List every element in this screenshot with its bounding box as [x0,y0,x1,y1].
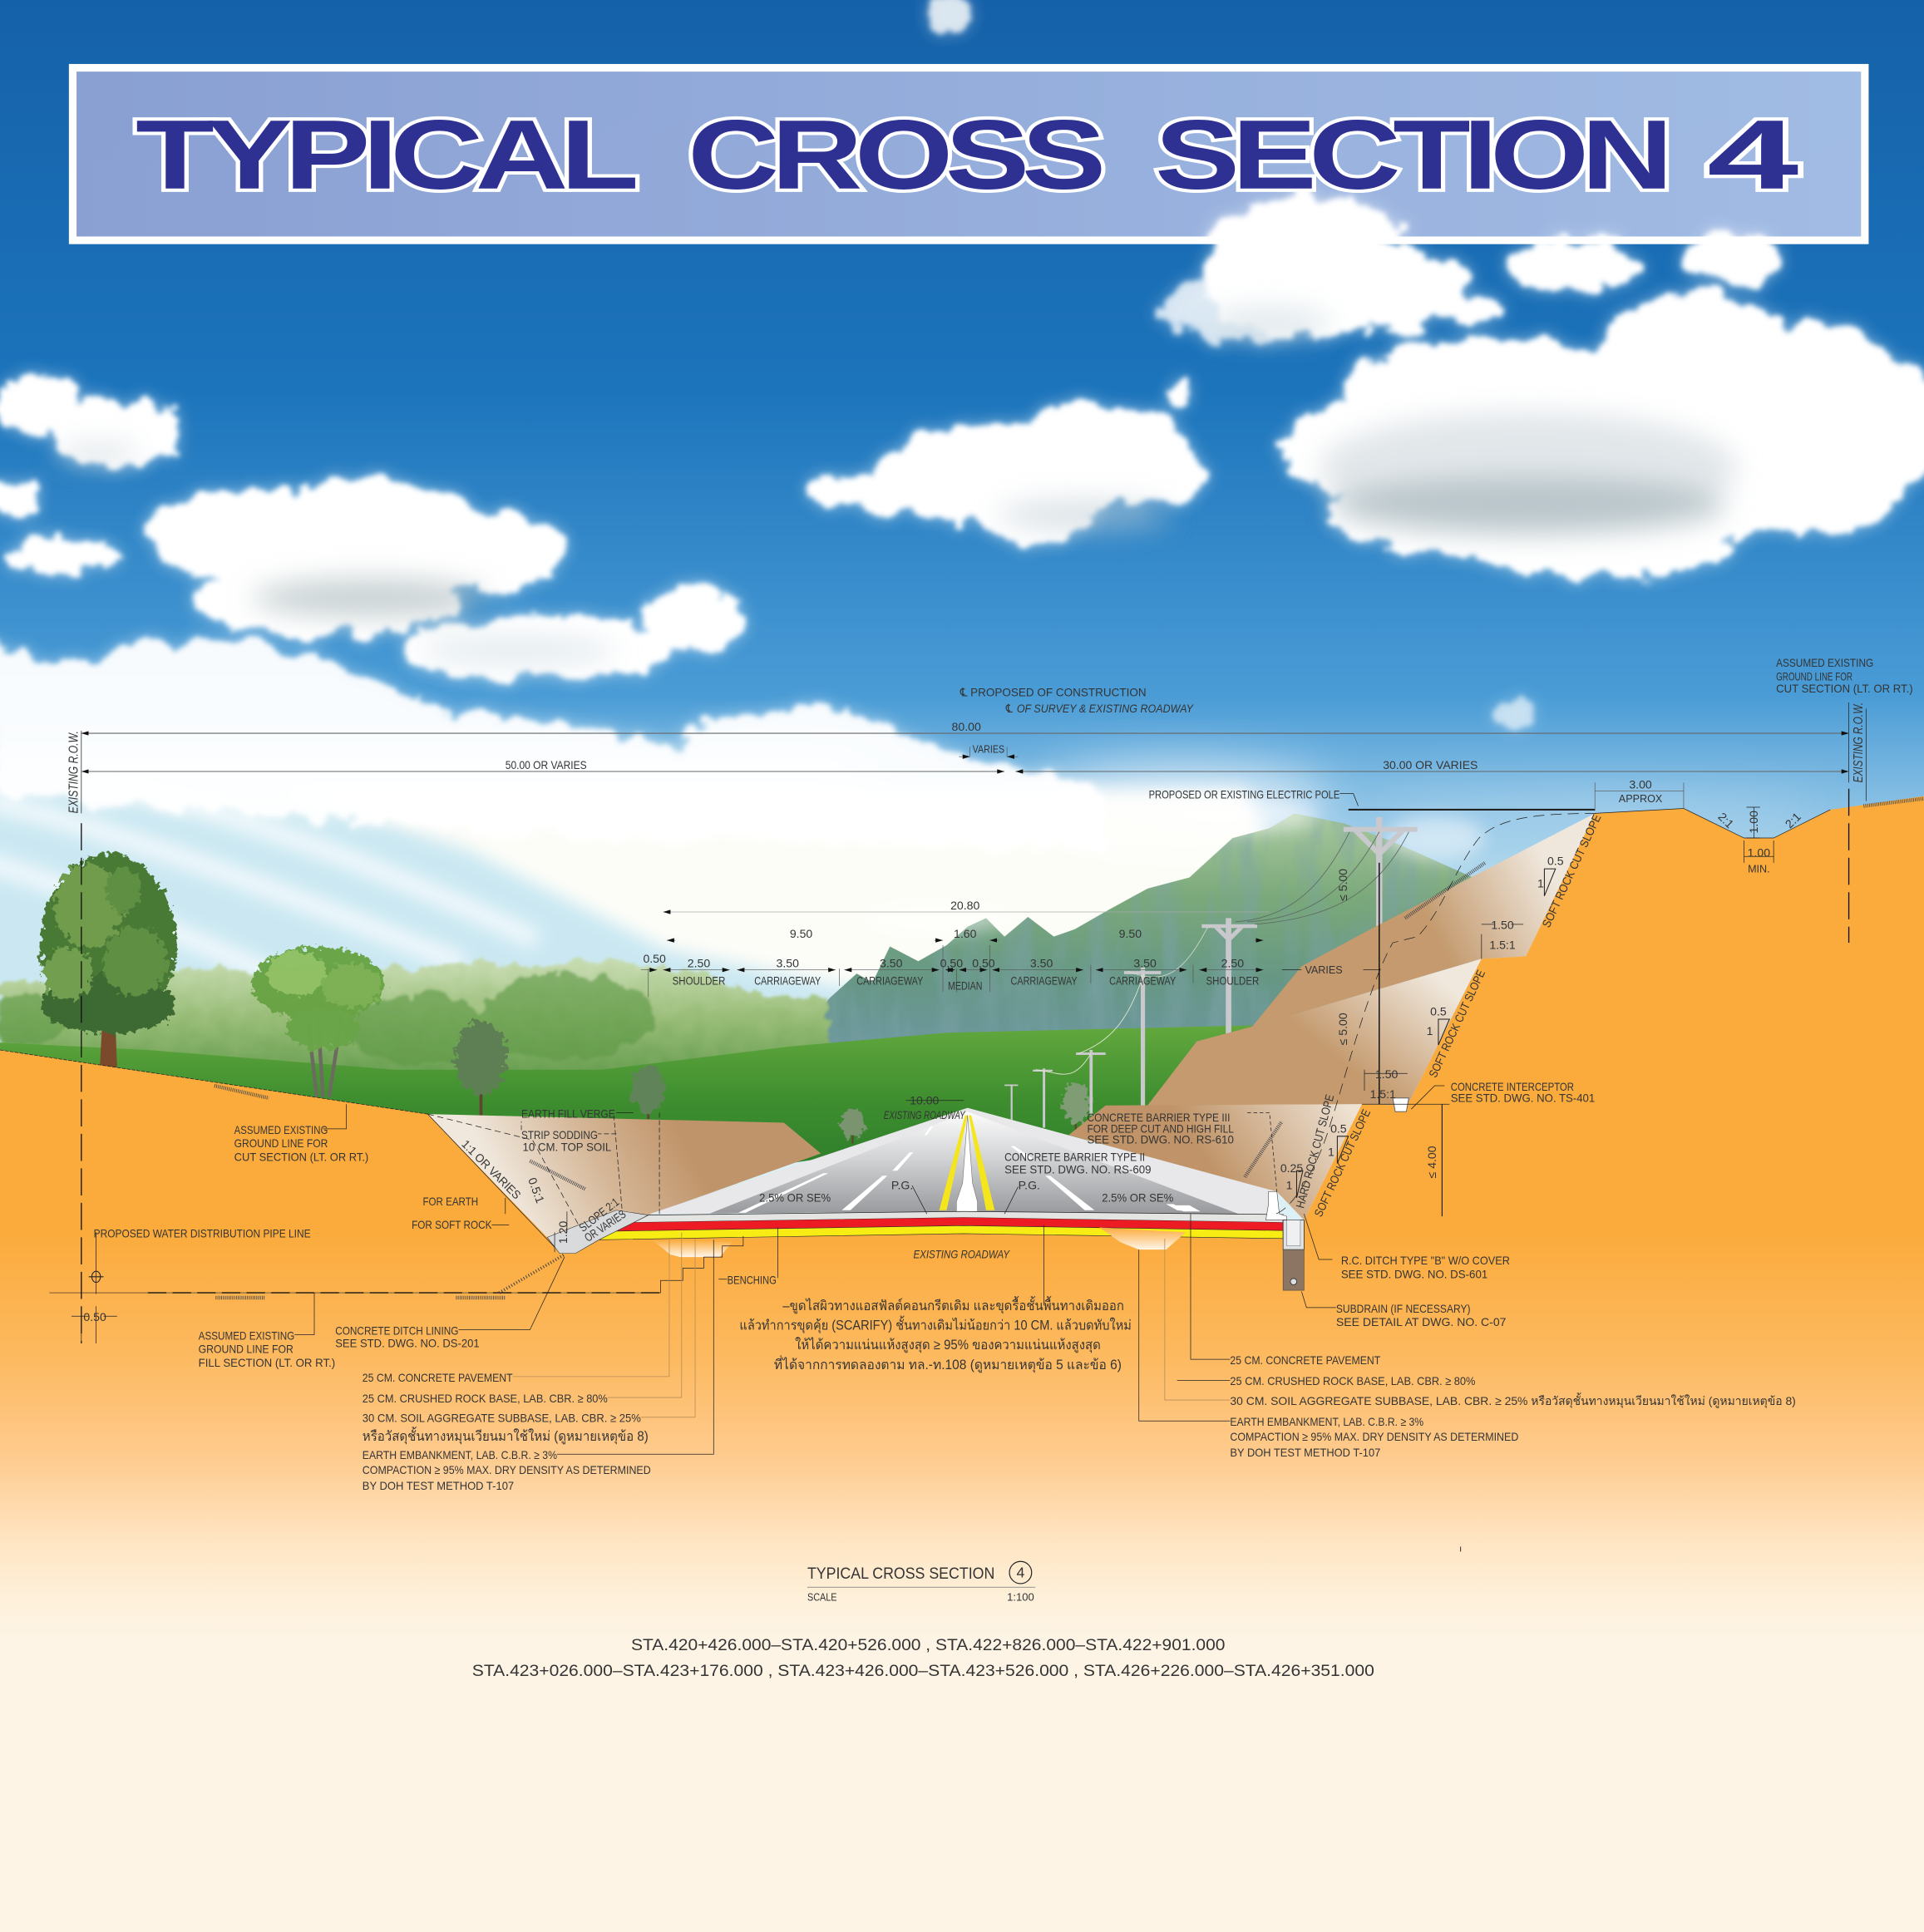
label: barrier type II: SEE STD. DWG. NO. RS-609 [1004,1162,1152,1175]
Thai note block: ที่ได้จากการทดลองตาม ทล.-ท.108 (ดูหมายเหตุข้อ 5 และข้อ 6) [774,1355,1122,1373]
label: assumed ground cut left [234,1123,368,1163]
section number badge [1009,1561,1032,1584]
stairs benching line [49,1236,743,1293]
fill slope dotted [499,1254,565,1293]
label: assumed ground right [1776,656,1913,695]
title text: 4 [1707,101,1798,210]
soil slope: right upper [1252,813,1595,1027]
label: centerline of construction: ℄ PROPOSED OF CONSTRUCTION [960,686,1147,699]
dimension chain: road widths: SHOULDER [1206,973,1259,987]
dimension chain: road widths: SHOULDER [673,973,725,987]
labels: cut slopes right: VARIES [1305,964,1343,976]
label: earth fill verge: EARTH FILL VERGE [521,1107,615,1121]
labels: cut slopes right: SOFT ROCK CUT SLOPE [1539,812,1604,929]
pavement notes: left: EARTH EMBANKMENT, LAB. C.B.R. ≥ 3% [363,1448,557,1461]
road left edge band [649,1108,968,1214]
subdrain [1283,1249,1304,1290]
pavement notes: left: 30 CM. SOIL AGGREGATE SUBBASE, LAB. CBR. ≥ 25% [363,1412,641,1425]
soil slope: right middle [1147,959,1482,1106]
lane dashes [738,1126,1201,1213]
label: concrete interceptor: CONCRETE INTERCEPTOR [1451,1080,1574,1093]
labels: cut slopes right: SOFT ROCK CUT SLOPE [1311,1107,1373,1219]
cloud: left [0,375,179,574]
label: centerline of construction: ℄ OF SURVEY & EXISTING ROADWAY [1004,702,1194,715]
label: concrete ditch lining: CONCRETE DITCH LINING [335,1323,458,1337]
dimension chain: road widths: 3.50 [1030,957,1053,970]
labels: right ditch dims: 1.00 [1748,845,1770,859]
Thai note block: แล้วทำการขุดคุ้ย (SCARIFY) ชั้นทางเดิมไม่น้อยกว่า 10 CM. แล้วบดทับใหม่ [739,1315,1132,1334]
title text: SECTION [1155,101,1665,210]
dimension chain: road widths [643,899,1259,992]
concrete interceptor [1393,1098,1408,1111]
cloud seen through panel [1201,186,1772,236]
road right edge band [968,1108,1277,1215]
dimension chain: road widths: 0.50 [643,952,666,965]
pipe symbol [89,1271,104,1282]
road surface [649,1108,1277,1220]
label: RC ditch: R.C. DITCH TYPE "B" W/O COVER [1341,1254,1510,1267]
pavement notes: right: BY DOH TEST METHOD T-107 [1230,1446,1380,1459]
benching right [1099,1227,1186,1249]
section number badge: 4 [1016,1565,1024,1581]
title panel [72,68,1865,298]
labels: cut slopes right: HARD ROCK CUT SLOPE [1293,1093,1336,1210]
labels: cut slopes right: ≤ 5.00 [1336,1013,1349,1045]
mountain [792,813,1473,1053]
labels: left slope: 1.20 [556,1221,570,1244]
labels: cut slopes right [1280,812,1604,1219]
pavement notes: right [1230,1353,1796,1459]
labels: cut slopes right: 0.5 [1330,1121,1347,1135]
pavement notes: left: BY DOH TEST METHOD T-107 [363,1479,514,1492]
label: assumed ground cut left: CUT SECTION (LT. OR RT.) [234,1150,368,1163]
label: assumed ground right: ASSUMED EXISTING [1776,656,1873,669]
section caption [807,1561,1035,1604]
title text [136,101,1798,210]
mountain fog [863,799,1485,933]
pole: third [1124,968,1161,1106]
label: centerline of construction [960,686,1194,715]
labels: right ditch dims: 3.00 [1629,778,1652,791]
label: water pipe: PROPOSED WATER DISTRIBUTION PIPE LINE [94,1226,311,1240]
dimension chain: road widths: 1.60 [954,927,977,940]
title text: CROSS [688,101,1102,210]
title text: TYPICAL [136,101,635,210]
labels: cut slopes right: ≤ 4.00 [1425,1146,1438,1178]
side barrier right [1265,1192,1287,1220]
cloud: right large [1285,296,1924,575]
soil slope: left [427,1114,821,1254]
main pole dark core [1379,863,1380,1104]
labels: cut slopes right: 1.5:1 [1370,1087,1396,1101]
labels: cut slopes right: SOFT ROCK CUT SLOPE [1426,968,1487,1079]
label: assumed ground cut left: GROUND LINE FOR [234,1136,328,1150]
labels: cut slopes right: 1 [1537,876,1544,890]
label: assumed ground right: GROUND LINE FOR [1776,669,1852,683]
yellow centre lines [940,1116,994,1210]
label: concrete ditch lining: SEE STD. DWG. NO. DS-201 [335,1336,480,1349]
labels: left slope: OR VARIES [582,1207,628,1244]
forest dark core [0,973,654,1063]
cloud: mid left [153,481,751,678]
ground hatches [215,799,1924,1298]
pavement notes: right: 30 CM. SOIL AGGREGATE SUBBASE, LAB. CBR. ≥ 25% หรือวัสดุชั้นทางหมุนเวียนมาใช้ใหม่ (ดูหมายเหตุข้อ 8) [1230,1392,1796,1408]
road labels: 2.5% OR SE% [759,1190,831,1204]
pavement notes: right: COMPACTION ≥ 95% MAX. DRY DENSITY AS DETERMINED [1230,1430,1518,1443]
label: strip sodding [521,1128,611,1154]
dimension chain: road widths: 3.50 [777,957,799,970]
dimension chain: road widths: 3.50 [880,957,903,970]
labels: cut slopes right: ≤ 5.00 [1336,869,1349,901]
labels: cut slopes right: 0.5 [1547,855,1564,868]
R.C. ditch [1283,1220,1304,1249]
top dimension labels [506,720,1478,771]
label: concrete ditch lining [335,1323,480,1349]
label: subdrain: SEE DETAIL AT DWG. NO. C-07 [1336,1315,1507,1328]
haze: pale cyan left [0,758,863,1053]
dimension chain: road widths: 20.80 [950,899,979,912]
electric poles [1004,817,1418,1129]
dimension chain: road widths: 2.50 [688,957,710,970]
label: barrier type III [1087,1111,1234,1146]
labels: cut slopes right: 1.50 [1491,919,1514,932]
dimension lines [72,733,1849,1343]
leader lines [0,708,1866,1454]
cloud shading [57,308,1738,666]
Thai note block: –ขูดไสผิวทางแอสฟัลต์คอนกรีตเดิม และขุดรื้อชั้นพื้นทางเดิมออก [782,1295,1124,1314]
labels: left slope: 0.5:1 [525,1175,547,1205]
concrete slab [634,1211,1283,1223]
road labels [759,1093,1174,1261]
section caption: TYPICAL CROSS SECTION [807,1565,994,1583]
labels: right ditch dims [1619,778,1803,875]
dimension chain: road widths: 0.50 [940,957,963,970]
pole: main [1344,817,1418,1104]
road labels: 2.5% OR SE% [1102,1190,1174,1204]
section caption: SCALE [807,1592,837,1604]
label: 0.50 offset: 0.50 [83,1310,106,1323]
label: barrier type III: SEE STD. DWG. NO. RS-610 [1087,1133,1234,1146]
labels: right ditch dims: 2:1 [1783,810,1803,830]
pole: fifth [1033,1068,1053,1127]
labels: right ditch dims: 2:1 [1715,810,1737,830]
labels: right ditch dims: MIN. [1748,864,1770,875]
pavement notes: left: 25 CM. CONCRETE PAVEMENT [363,1371,513,1384]
road labels: P.G. [1019,1179,1040,1192]
Thai note block [739,1295,1132,1373]
soil slope: right lower [1068,1104,1362,1220]
label: strip sodding: 10 CM. TOP SOIL [523,1141,611,1154]
station ranges: STA.420+426.000–STA.420+526.000 , STA.422+826.000–STA.422+901.000 [631,1637,1225,1654]
label: assumed ground fill [199,1328,335,1369]
dimension chain: road widths: CARRIAGEWAY [856,973,924,987]
tree: second [251,947,385,1097]
slope triangles [1296,869,1556,1198]
power lines [1035,832,1408,1074]
road labels: EXISTING ROADWAY [884,1108,966,1121]
section caption: 1:100 [1007,1592,1034,1604]
labels: right ditch dims: 1.00 [1747,811,1760,833]
road labels: EXISTING ROADWAY [913,1248,1010,1261]
top dimension labels: 80.00 [952,720,981,733]
dimension chain: road widths: 9.50 [1119,927,1142,940]
labels: cut slopes right: 1 [1286,1179,1293,1192]
station ranges: STA.423+026.000–STA.423+176.000 , STA.423+426.000–STA.423+526.000 , STA.426+226.000–STA.426+351.000 [472,1663,1374,1680]
road labels: 10.00 [910,1093,940,1106]
label: electric pole: PROPOSED OR EXISTING ELECTRIC POLE [1149,788,1339,801]
small tick [1460,1546,1462,1551]
labels: left slope [412,1137,628,1244]
label: concrete interceptor: SEE STD. DWG. NO. TS-401 [1451,1091,1595,1104]
labels: left slope: 1:1 OR VARIES [459,1137,524,1201]
top dimension labels: VARIES [973,744,1004,756]
earth ditch lining left [547,1210,649,1254]
label: RC ditch [1341,1254,1510,1280]
label: assumed ground right: CUT SECTION (LT. OR RT.) [1776,682,1913,695]
labels: left slope: SLOPE 2:1 [576,1195,622,1235]
label: barrier type III: FOR DEEP CUT AND HIGH FILL [1087,1121,1234,1135]
dimension chain: road widths: CARRIAGEWAY [1109,973,1177,987]
haze streaks [0,779,530,986]
label: barrier type III: CONCRETE BARRIER TYPE III [1087,1111,1230,1124]
haze: right soft clouds [1035,764,1824,838]
cloud: upper right [1158,218,1776,340]
haze: white low sky [0,779,1295,992]
label: existing ROW left: EXISTING R.O.W. [67,731,81,813]
existing ground dashes [148,1292,661,1294]
dimension chain: road widths: 9.50 [790,927,812,940]
labels: right ditch dims: APPROX [1619,793,1663,805]
clouds [0,0,1924,850]
pavement notes: left [363,1371,651,1492]
pavement notes: left: หรือวัสดุชั้นทางหมุนเวียนมาใช้ใหม่ (ดูหมายเหตุข้อ 8) [363,1426,649,1445]
labels: left slope: FOR EARTH [422,1195,478,1208]
dimension chain: road widths: 0.50 [972,957,995,970]
cloud: centre [797,385,1204,541]
subbase layer: yellow [599,1225,1283,1240]
pole: fourth [1076,1050,1106,1116]
labels: cut slopes right: 1 [1427,1024,1433,1037]
top dimension labels: 50.00 OR VARIES [506,758,587,771]
road labels: P.G. [891,1179,913,1192]
label: existing ROW right: EXISTING R.O.W. [1852,702,1866,782]
labels: left slope: FOR SOFT ROCK [412,1218,492,1231]
label: assumed ground fill: ASSUMED EXISTING [199,1328,294,1342]
label: subdrain: SUBDRAIN (IF NECESSARY) [1336,1302,1470,1315]
dimension chain: road widths: CARRIAGEWAY [1011,973,1078,987]
labels: cut slopes right: 0.5 [1430,1005,1447,1018]
label: concrete interceptor [1451,1080,1595,1104]
cloud: small patch right [1492,703,1535,721]
centre barrier [956,1116,978,1220]
top dimension labels: 30.00 OR VARIES [1383,758,1478,771]
Thai note block: ให้ได้ความแน่นแห้งสูงสุด ≥ 95% ของความแน่นแห้งสูงสุด [795,1337,1101,1353]
label: RC ditch: SEE STD. DWG. NO. DS-601 [1341,1267,1487,1280]
benching left [652,1240,733,1257]
label: benching: BENCHING [728,1274,777,1287]
label: barrier type II [1004,1150,1152,1175]
pavement notes: right: EARTH EMBANKMENT, LAB. C.B.R. ≥ 3% [1230,1415,1424,1428]
pavement notes: right: 25 CM. CONCRETE PAVEMENT [1230,1353,1381,1367]
orange ground [0,796,1924,1932]
label: subdrain [1336,1302,1507,1328]
labels: cut slopes right: 1.5:1 [1489,938,1516,951]
label: assumed ground cut left: ASSUMED EXISTING [234,1123,328,1136]
label: assumed ground fill: FILL SECTION (LT. OR RT.) [199,1356,335,1369]
dimension chain: road widths: CARRIAGEWAY [754,973,821,987]
ROW vertical lines [81,702,1849,1343]
cloud: top small [925,0,974,33]
pavement notes: left: COMPACTION ≥ 95% MAX. DRY DENSITY AS DETERMINED [363,1463,651,1476]
label: assumed ground fill: GROUND LINE FOR [199,1343,294,1356]
labels: cut slopes right: 1 [1328,1146,1334,1159]
pole: second [1201,918,1257,1106]
dimension chain: road widths: MEDIAN [948,978,982,992]
label: strip sodding: STRIP SODDING [521,1128,598,1141]
trees: small [455,1020,1089,1144]
pole: sixth [1004,1085,1018,1129]
labels: cut slopes right: 0.25 [1280,1161,1303,1175]
tree: large [41,854,176,1067]
cloud: haze bank left [0,634,1109,850]
forest band [0,961,828,1103]
label: barrier type II: CONCRETE BARRIER TYPE II [1004,1150,1145,1163]
station ranges [472,1637,1374,1680]
labels: cut slopes right: 1.50 [1375,1067,1399,1081]
crushed rock base layer: red [615,1218,1283,1231]
pavement notes: right: 25 CM. CRUSHED ROCK BASE, LAB. CBR. ≥ 80% [1230,1374,1476,1387]
grass hill [0,1025,1252,1171]
dimension chain: road widths: 2.50 [1221,957,1244,970]
pavement notes: left: 25 CM. CRUSHED ROCK BASE, LAB. CBR. ≥ 80% [363,1392,608,1405]
dimension chain: road widths: 3.50 [1133,957,1157,970]
